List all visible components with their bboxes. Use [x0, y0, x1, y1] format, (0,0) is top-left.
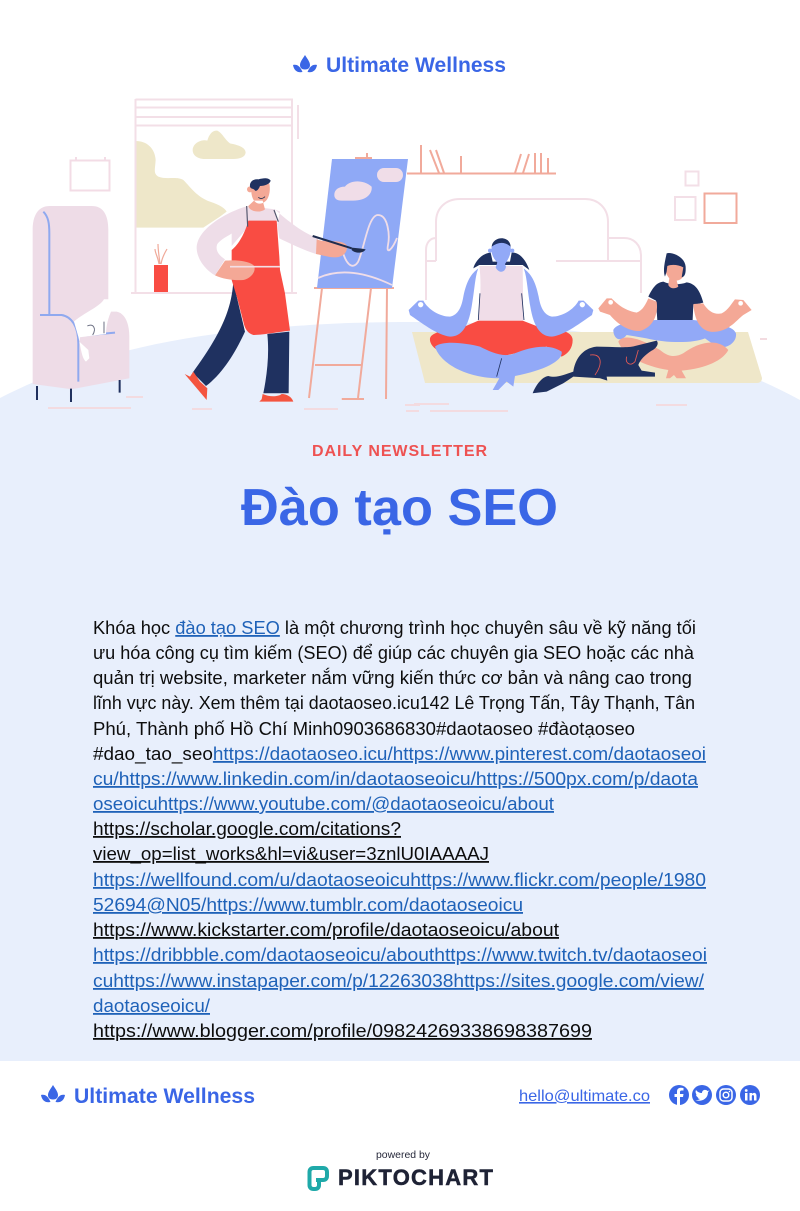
body text: cuhttps://www.instapaper.com/p/12263038https://sites.google.com/view/ — [93, 971, 704, 991]
illustration: woman meditating — [409, 238, 593, 390]
body text: oseoicuhttps://www.youtube.com/@daotaoseoicu/about — [93, 794, 554, 814]
body text: Khóa học đào tạo SEO là một chương trình học chuyên sâu về kỹ năng tối — [93, 618, 696, 638]
footer logo: Ultimate Wellness — [74, 1085, 255, 1108]
body text: quản trị website, marketer nắm vững kiến thức cơ bản và nâng cao trong — [93, 667, 692, 688]
header logo: Ultimate Wellness — [326, 54, 506, 77]
illustration: man meditating — [598, 253, 752, 378]
body text — [93, 618, 707, 1041]
shirt — [197, 206, 318, 275]
illustration: armchair with cat — [33, 206, 129, 402]
body text: 52694@N05/https://www.tumblr.com/daotaoseoicu — [93, 895, 523, 915]
eyebrow: DAILY NEWSLETTER — [312, 443, 487, 460]
body text: daotaoseoicu/ — [93, 996, 210, 1016]
apron — [232, 221, 290, 335]
illustration: easel and canvas — [309, 153, 408, 399]
illustration: yoga mat — [412, 332, 762, 383]
illustration: window with hills — [131, 99, 298, 293]
body text: https://www.kickstarter.com/profile/daotaoseoicu/about — [93, 920, 559, 940]
illustration: plant pot — [154, 244, 168, 292]
icon: instagram — [716, 1085, 736, 1105]
shoes — [185, 372, 293, 402]
illustration: sofa outline — [426, 199, 641, 300]
pale blue curved content background — [0, 322, 800, 1061]
body text: #dao_tao_seo https://daotaoseo.icu/https://www.pinterest.com/daotaoseoi — [93, 744, 706, 765]
illustration: wall frames — [675, 172, 736, 223]
pants — [193, 282, 289, 393]
social icons — [669, 1085, 760, 1105]
body text: ưu hóa công cụ tìm kiếm (SEO) để giúp các chuyên gia SEO hoặc các nhà — [93, 643, 695, 663]
piktochart logo: PIKTOCHART — [338, 1165, 494, 1190]
hands and brushes — [215, 239, 347, 280]
body text: https://scholar.google.com/citations? — [93, 819, 401, 839]
icon: facebook — [669, 1085, 689, 1105]
body text: lĩnh vực này. Xem thêm tại daotaoseo.icu142 Lê Trọng Tấn, Tây Thạnh, Tân — [93, 693, 695, 713]
illustration: wall frame — [70, 157, 110, 190]
illustration: dog — [533, 341, 658, 393]
body text: view_op=list_works&hl=vi&user=3znlU0IAAAAJ — [93, 844, 489, 865]
body text: https://dribbble.com/daotaoseoicu/abouthttps://www.twitch.tv/daotaoseoi — [93, 945, 707, 965]
body text: https://wellfound.com/u/daotaoseoicuhttps://www.flickr.com/people/1980 — [93, 870, 706, 890]
head — [248, 183, 270, 212]
powered by label: powered by — [376, 1150, 430, 1161]
icon: linkedin — [740, 1085, 760, 1105]
body text: https://www.blogger.com/profile/09824269338698387699 — [93, 1021, 592, 1041]
illustration: painter — [185, 178, 366, 402]
title: Đào tạo SEO — [241, 479, 558, 537]
illustration: bookshelf — [407, 145, 556, 174]
illustration: floor dashes — [48, 339, 767, 411]
body text: Phú, Thành phố Hồ Chí Minh0903686830#daotaoseo #đàotạoseo — [93, 719, 635, 739]
icon: twitter — [692, 1085, 712, 1105]
body text: cu/https://www.linkedin.com/in/daotaoseoicu/https://500px.com/p/daota — [93, 769, 699, 789]
footer email: hello@ultimate.co — [519, 1088, 650, 1105]
